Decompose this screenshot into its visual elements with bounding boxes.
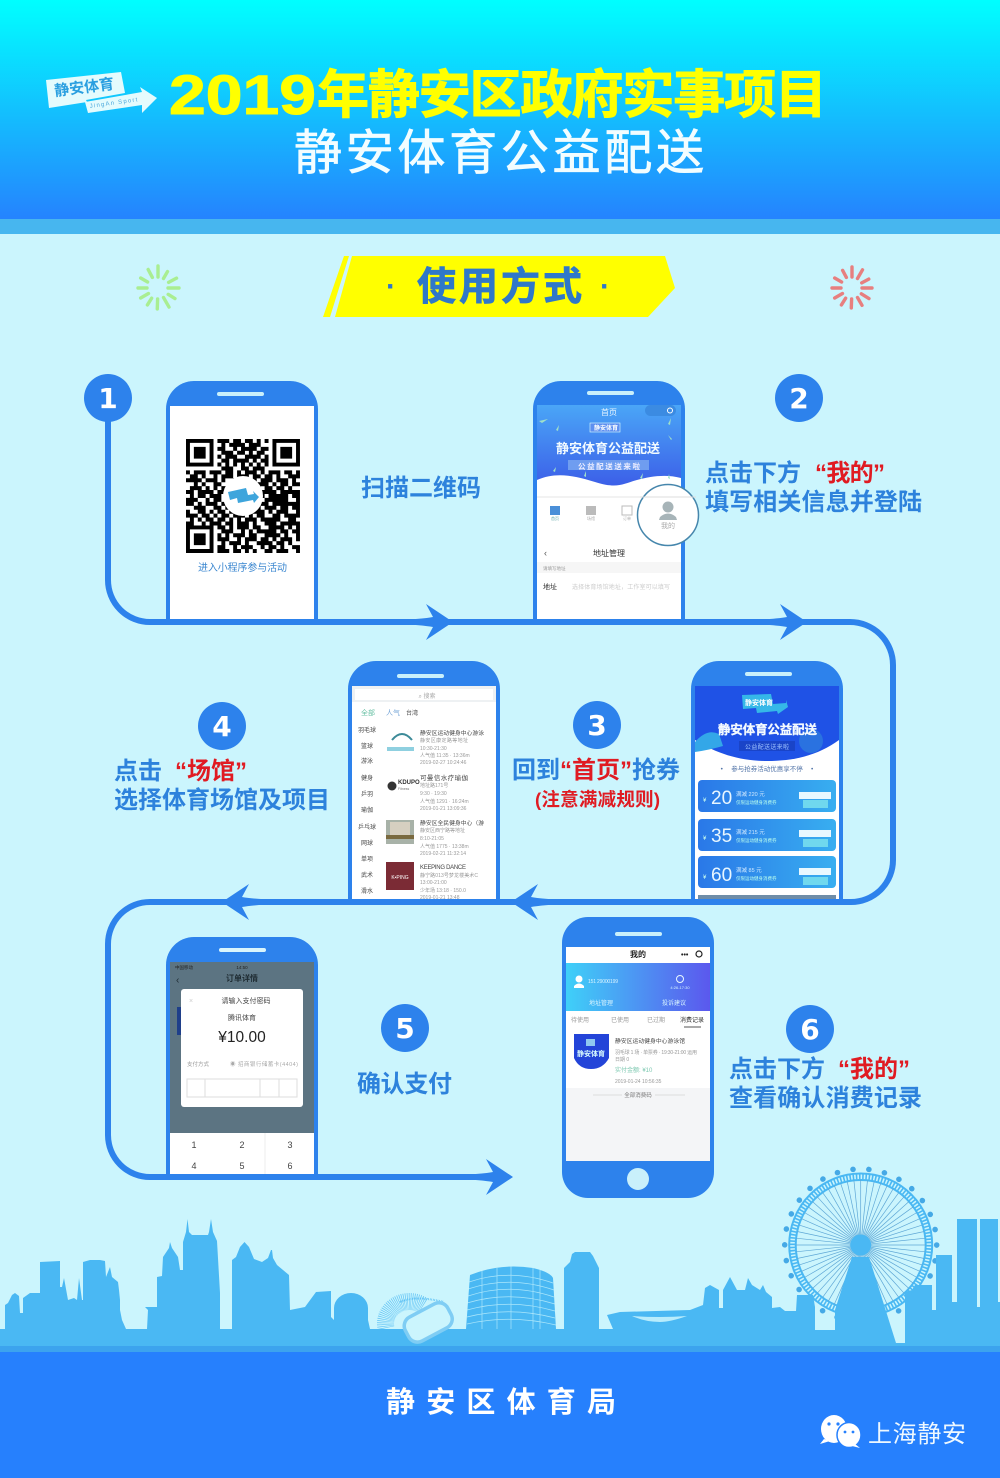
title: 年静安区政府实事项目 <box>317 67 827 125</box>
step 3 text: 回到 <box>512 757 560 784</box>
venue categories: 瑜伽 <box>361 806 373 814</box>
record thumbnail: 静安体育 <box>577 1049 605 1058</box>
arrow 2 <box>752 604 807 640</box>
phone 2: home screen with 我的 highlight: 地址管理 <box>593 548 625 558</box>
phone 6: my records screen: 静安区运动健身中心游泳馆 <box>615 1037 685 1045</box>
phone 2: home screen with 我的 highlight: ‹ <box>544 548 547 558</box>
phone 2: home screen with 我的 highlight: 静安体育公益配送 <box>556 441 660 456</box>
section heading: 使用方式: 使用方式 <box>417 266 582 309</box>
number keypad: 5 <box>239 1161 245 1171</box>
arrow 1 <box>398 604 453 640</box>
phone 5: payment screen: ‹ <box>176 975 179 986</box>
phone 1: QR code screen <box>166 381 318 622</box>
coupon 20: 20 <box>711 788 732 809</box>
phone 6: my records screen: 待使用 <box>571 1016 589 1024</box>
payment dialog <box>181 989 303 1107</box>
footer band <box>0 1352 1000 1478</box>
phone 4: venue list screen: 人气 <box>386 708 400 717</box>
venue card 4: 静宁路013号梦龙楼美术C <box>420 872 478 879</box>
phone 6: my records screen: 羽毛球 1 场 · 单票券 · 19:30-21:00 运用 <box>615 1049 697 1056</box>
venue card 4: K•PING <box>391 875 409 881</box>
step 2 number <box>775 374 823 422</box>
coupon 35: 仅限运动健身消费券 <box>736 837 777 844</box>
coupon 20: 仅限运动健身消费券 <box>736 799 777 806</box>
watermark text: 上海静安: 上海静安 <box>868 1421 966 1448</box>
coupon 60: 仅限运动健身消费券 <box>736 875 777 882</box>
step 4 text: “场馆” <box>175 758 247 785</box>
phone 2: home screen with 我的 highlight: 选择体育场馆地址，工作室可以填写 <box>572 583 670 591</box>
venue categories: 乒乓球 <box>358 823 376 831</box>
phone 4: venue list screen <box>348 661 500 902</box>
QR centre logo <box>223 476 263 516</box>
phone 5: payment screen: 订单详情 <box>226 973 258 983</box>
step 1 text: 扫描二维码 <box>361 475 481 502</box>
magnifier: 我的: 我的 <box>661 521 675 530</box>
coupon 60: 60 <box>711 865 732 886</box>
phone 2: home screen with 我的 highlight: 场馆 <box>587 515 595 521</box>
venue card 4: 少年场 13:18 · 150.0 <box>420 887 466 894</box>
venue card 2: 可曼信水疗瑜伽 <box>420 773 468 782</box>
step 4 text: 点击 <box>114 758 162 785</box>
phone 6: my records screen: 2019-01-24 10:56:35 <box>615 1079 662 1085</box>
coupon 60: 满减 85 元 <box>736 866 762 874</box>
step 1 number <box>84 374 132 422</box>
venue card 1 <box>387 729 484 766</box>
step 6 text: “我的” <box>838 1056 910 1083</box>
phone 6: my records screen: 消费记录 <box>680 1016 704 1024</box>
phone 3: coupon screen: 公益配送送来啦 <box>745 743 789 751</box>
coupon 35: 满减 215 元 <box>736 828 765 836</box>
number keypad: 4 <box>191 1161 197 1171</box>
venue categories: 网球 <box>361 839 373 847</box>
coupon 20: 满减 220 元 <box>736 790 765 798</box>
payment dialog: × <box>189 998 193 1005</box>
venue categories: 篮球 <box>361 742 373 750</box>
venue card 4: 2019-01-21 13:48 <box>420 895 460 901</box>
coupon 35: 35 <box>711 826 732 847</box>
arrow 3 <box>511 884 566 920</box>
venue card 4: KEEPING DANCE <box>420 865 466 871</box>
payment dialog: ¥10.00 <box>217 1029 266 1046</box>
step 4 number: 4 <box>212 710 232 743</box>
phone 2: home screen with 我的 highlight: 地址 <box>543 582 557 591</box>
phone 4: venue list screen: ⌕ 搜索 <box>418 692 436 700</box>
venue card 1: 静安区康定路等地址 <box>420 737 468 744</box>
slinky sculpture <box>385 1298 444 1328</box>
phone 3: coupon screen: 静安体育 <box>745 698 773 707</box>
record thumbnail <box>574 1034 609 1069</box>
coupon 60 <box>698 856 836 888</box>
step 4 number <box>198 702 246 750</box>
step 4 text: 选择体育场馆及项目 <box>114 786 330 814</box>
title: 2019 <box>169 63 316 126</box>
venue card 3: 8:10-21:05 <box>420 836 444 842</box>
step 3 text: “首页” <box>560 757 632 784</box>
phone 6: my records screen: 已使用 <box>611 1016 629 1024</box>
phone-shaped sculpture <box>401 1299 456 1346</box>
phone 5: payment screen: 14:50 <box>236 965 248 970</box>
header banner <box>0 0 1000 234</box>
step 6 text: 点击下方 <box>729 1055 825 1083</box>
phone 6: my records screen: ••• <box>681 952 689 959</box>
watermark: WeChat icon <box>820 1415 861 1448</box>
venue card 3: 人气值 1775 · 13:38m <box>420 843 469 850</box>
number keypad: 6 <box>287 1161 293 1171</box>
arrow 5 <box>458 1159 513 1195</box>
step 3 text <box>512 756 680 810</box>
subtitle: 静安体育公益配送 <box>294 127 704 180</box>
round building grid lines <box>467 1266 556 1329</box>
phone 6: my records screen: 地址管理 <box>589 999 613 1007</box>
phone 3: coupon screen: 静安体育公益配送 <box>718 722 817 737</box>
stadium opening <box>632 1316 687 1322</box>
phone 2: home screen with 我的 highlight <box>533 381 698 622</box>
logo badge: 静安体育 arrow: 静安体育 <box>53 75 115 100</box>
phone 4: venue list screen: 台湾 <box>406 709 418 717</box>
step 2 number: 2 <box>789 382 809 415</box>
step 4 text <box>114 758 330 814</box>
coupon 20: ¥ <box>703 798 707 804</box>
venue card 2: Fitness <box>398 787 410 791</box>
venue card 1: 静安区运动健身中心游泳 <box>420 729 484 737</box>
coupon 35: ¥ <box>703 836 707 842</box>
phone 2: home screen with 我的 highlight: 公益配送送来啦 <box>578 461 640 471</box>
phone 3: coupon screen: • 参与抢券活动优惠享不停 • <box>721 764 814 773</box>
step 5 number: 5 <box>395 1012 415 1045</box>
magnifier: 我的 <box>638 484 698 546</box>
step 6 text: 查看确认消费记录 <box>729 1085 922 1112</box>
venue card 1: 人气值 11:35 · 13:36m <box>420 752 470 759</box>
step 6 number: 6 <box>800 1013 820 1046</box>
venue card 2: 9:30 · 19:30 <box>420 791 447 797</box>
venue categories: 滑水 <box>361 887 373 895</box>
venue card 2: 地址路171号 <box>420 782 448 789</box>
venue card 3: 静安区全民健身中心（游 <box>420 819 484 827</box>
step 2 text: 点击下方 <box>705 459 801 487</box>
phone 6: my records screen <box>562 917 714 1198</box>
step 3 number <box>573 701 621 749</box>
phone 2: home screen with 我的 highlight: 首页 <box>551 515 559 521</box>
phone 6: my records screen: 4:26-17:30 <box>670 985 690 990</box>
phone 2: home screen with 我的 highlight: 首页 <box>601 407 617 417</box>
phone 6: my records screen: 投诉建议 <box>662 999 686 1007</box>
phone 6: my records screen: 实付金额: ¥10 <box>615 1066 653 1074</box>
ferris wheel <box>785 1169 937 1321</box>
decoration: red burst <box>832 267 872 308</box>
venue categories: 武术 <box>361 871 373 879</box>
payment dialog: 请输入支付密码 <box>222 996 270 1005</box>
phone 2: home screen with 我的 highlight: 静安体育 <box>594 424 618 432</box>
number keypad: 2 <box>239 1140 245 1150</box>
venue card 2: 人气值 1291 · 16:24m <box>420 798 469 805</box>
flow line connecting steps <box>108 398 893 1177</box>
step 1 number: 1 <box>98 382 118 415</box>
venue categories <box>358 726 376 895</box>
logo badge: 静安体育 arrow <box>46 72 157 113</box>
phone 6: my records screen: 151 29000199 <box>588 979 618 985</box>
step 6 text <box>729 1055 922 1112</box>
step 5 text: 确认支付 <box>357 1071 452 1098</box>
phone 4: venue list screen: 全部 <box>361 708 375 717</box>
venue categories: 健身 <box>361 774 373 782</box>
decoration: green burst <box>138 266 179 309</box>
step 2 text: “我的” <box>815 460 885 487</box>
step 3 text: (注意满减规则) <box>535 789 660 810</box>
QR code <box>186 439 300 553</box>
number keypad: 1 <box>191 1140 197 1150</box>
phone 6: my records screen: 日期 0 <box>615 1057 629 1063</box>
phone 2: home screen with 我的 highlight: 请填写地址 <box>543 565 566 572</box>
step 2 text <box>705 459 922 516</box>
step 2 text: 填写相关信息并登陆 <box>705 489 922 516</box>
venue categories: 游泳 <box>361 757 373 765</box>
phone 6: my records screen: 已过期 <box>647 1016 665 1024</box>
city skyline <box>0 1219 1000 1353</box>
coupon 20 <box>698 780 836 812</box>
footer text: 静安区体育局: 静安区体育局 <box>386 1386 616 1419</box>
step 3 text: 抢券 <box>632 756 680 784</box>
logo badge: 静安体育 arrow: JingAn Sport <box>89 97 138 110</box>
QR caption: 进入小程序参与活动 <box>198 561 287 574</box>
coupon 60: ¥ <box>703 875 707 881</box>
phone 6: my records screen: 我的 <box>630 949 646 959</box>
venue card 2: KDUPO <box>398 780 420 786</box>
venue card 3: 静安区西宁路等地址 <box>420 827 465 834</box>
venue card 4 <box>386 862 478 901</box>
phone 6: my records screen: 全部消费码 <box>624 1091 652 1099</box>
step 6 number <box>786 1005 834 1053</box>
number keypad: 3 <box>287 1140 293 1150</box>
section heading: 使用方式: · <box>600 270 610 303</box>
payment dialog: 支付方式 <box>187 1060 210 1068</box>
phone 5: payment screen <box>166 937 318 1177</box>
step 3 number: 3 <box>587 709 607 742</box>
phone 2: home screen with 我的 highlight: 订单 <box>623 515 631 521</box>
venue card 1: 10:30-21:30 <box>420 746 447 752</box>
payment dialog: 腾讯体育 <box>228 1013 256 1022</box>
number keypad <box>170 1133 314 1177</box>
phone 5: payment screen: 中国移动 <box>175 964 193 971</box>
phone 3: coupon screen <box>691 661 843 902</box>
venue card 1: 2019-02-27 10:24:46 <box>420 760 467 766</box>
venue categories: 单项 <box>361 855 373 863</box>
venue categories: 羽毛球 <box>358 726 376 734</box>
payment dialog: ◉ 招商银行储蓄卡(4404) <box>230 1060 298 1068</box>
venue card 2: 2019-01-21 13:09:36 <box>420 806 467 812</box>
venue card 3 <box>386 819 484 857</box>
venue categories: 乒羽 <box>361 790 373 798</box>
venue card 3: 2019-02-21 11:32:14 <box>420 851 466 857</box>
venue card 4: 13:00-21:00 <box>420 880 447 886</box>
arrow 4 <box>222 884 277 920</box>
step 5 number <box>381 1004 429 1052</box>
venue card 2 <box>388 773 469 812</box>
section heading: 使用方式 <box>323 256 675 317</box>
section heading: 使用方式: · <box>386 270 396 303</box>
coupon 35 <box>698 819 836 851</box>
